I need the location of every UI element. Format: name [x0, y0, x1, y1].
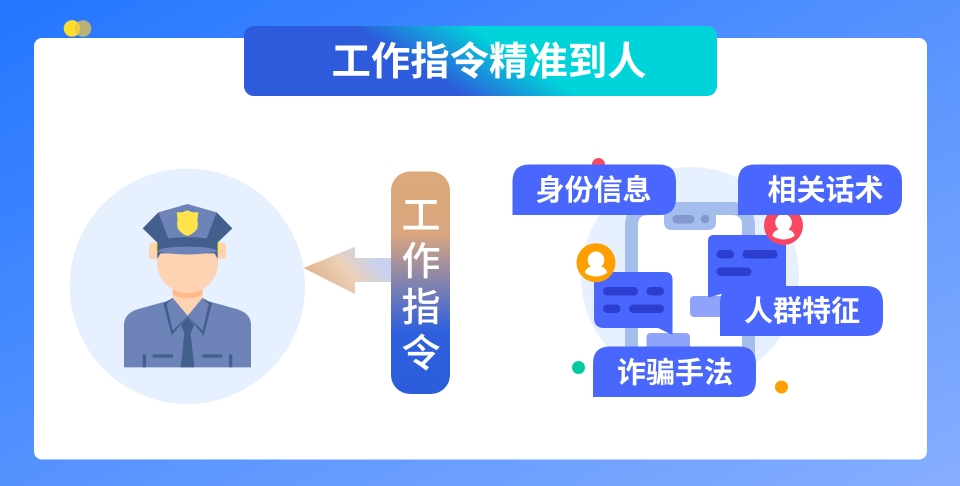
pill vertical text: [401, 195, 441, 376]
orange dot: [775, 380, 788, 394]
face: [157, 248, 218, 293]
label bubble: identity information: [512, 164, 676, 215]
label bubble: fraud techniques: [593, 346, 756, 397]
phone chat illustration: [572, 158, 803, 394]
police officer illustration: [70, 169, 305, 404]
label bubble: crowd characteristics: [720, 286, 883, 336]
police cap: [143, 204, 232, 259]
phone frame: [632, 208, 748, 380]
red dot: [592, 158, 605, 171]
title text: 工作指令精准到人: [331, 40, 647, 84]
collar: [163, 298, 212, 336]
label bubble: fraud techniques: 诈骗手法: [617, 356, 733, 390]
light reply block upper: [690, 296, 735, 317]
pocket details: [143, 354, 232, 367]
cap badge: [176, 210, 199, 236]
pill vertical text: 指: [401, 287, 441, 330]
arrow pointing to officer: [304, 247, 391, 294]
title banner: [244, 26, 717, 96]
pill vertical text: 作: [401, 241, 441, 284]
label bubble: crowd characteristics: 人群特征: [744, 295, 860, 328]
red avatar: [764, 206, 803, 245]
ears: [149, 243, 226, 259]
label bubble: related scripts: 相关话术: [767, 174, 884, 207]
right chat bubble: [708, 235, 786, 298]
orange avatar: [576, 243, 616, 282]
green dot: [572, 361, 585, 374]
pale circle backdrop: [581, 167, 799, 385]
decorative yellow dots: [64, 20, 91, 37]
pill vertical text: 令: [401, 333, 441, 376]
pill vertical text: 工: [401, 195, 441, 238]
label bubble: related scripts: [738, 164, 902, 215]
work order pill: [391, 172, 450, 394]
body uniform: [124, 299, 251, 367]
label bubble: identity information: 身份信息: [535, 174, 652, 207]
phone notch: [664, 205, 716, 230]
necktie: [181, 317, 194, 367]
pale circle backdrop: [70, 169, 305, 404]
left chat bubble: [594, 272, 672, 335]
light reply block lower: [646, 333, 690, 363]
neck: [173, 287, 203, 299]
